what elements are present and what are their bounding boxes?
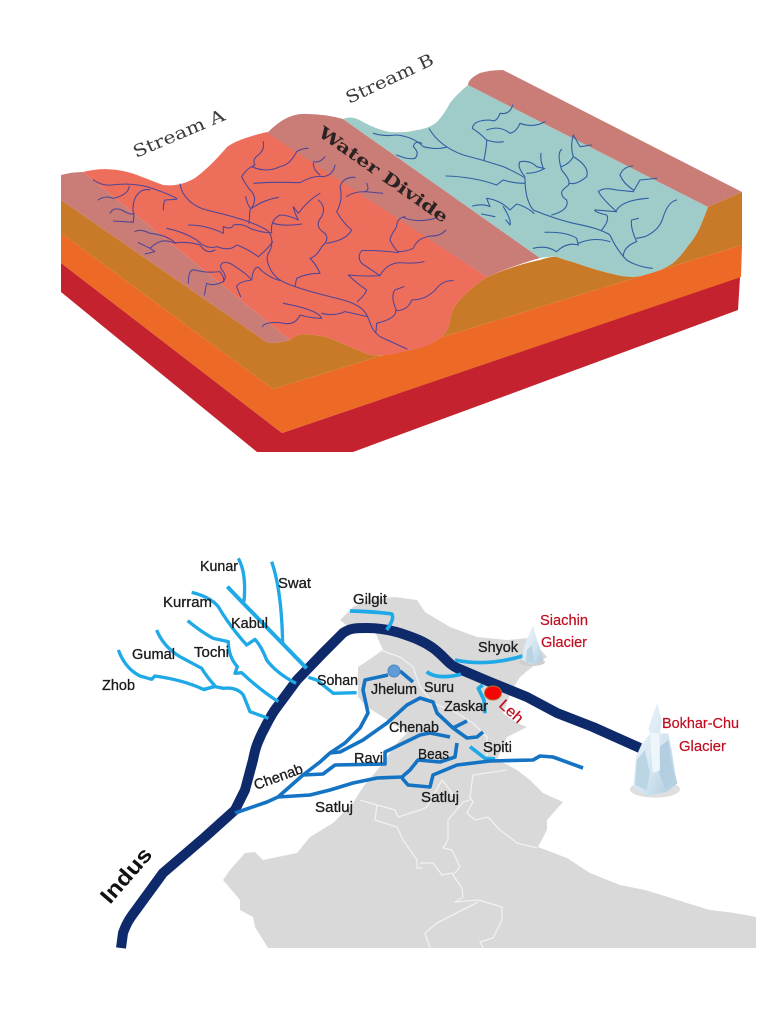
red bottom rock layer (61, 263, 740, 452)
rivers: Punjab tributaries (235, 671, 583, 813)
label: Siachin Glacier: Glacier (541, 634, 587, 651)
label: Suru: Suru (424, 680, 454, 696)
orange rock layer (61, 233, 742, 433)
river network: stream A east (262, 217, 453, 332)
label: Kunar: Kunar (200, 559, 238, 575)
label: Beas: Beas (418, 747, 449, 763)
label: Siachin Glacier: Siachin (540, 612, 588, 629)
label: Jhelum: Jhelum (371, 682, 417, 698)
label: Spiti: Spiti (483, 740, 512, 756)
left ridge band (61, 172, 290, 343)
label: Indus: Indus (95, 842, 157, 908)
label: Bokhar-Chu Glacier: Glacier (679, 738, 726, 755)
label: Sohan: Sohan (317, 673, 358, 689)
label: Chenab lower: Chenab (252, 761, 305, 794)
label: Zaskar: Zaskar (444, 699, 488, 715)
river network: stream A west (93, 142, 407, 349)
right ridge band (468, 70, 742, 207)
panel: watershed block diagram (61, 50, 742, 452)
label: Swat: Swat (278, 576, 311, 592)
label: Bokhar-Chu Glacier: Bokhar-Chu (662, 715, 739, 732)
label: Chenab upper: Chenab (389, 720, 439, 736)
label: Satluj right: Satluj (421, 790, 459, 806)
panel: Indus river system map (95, 558, 756, 948)
water divide ridge band (267, 114, 540, 277)
map: state boundary lines (360, 650, 537, 948)
label: Satluj left: Satluj (315, 800, 353, 816)
label: Water Divide: Water Divide (314, 122, 452, 227)
basin of stream A (83, 132, 487, 355)
map: grey landmass of north India (223, 597, 756, 948)
label: Tochi: Tochi (194, 645, 229, 661)
label: Shyok: Shyok (478, 640, 519, 656)
label: Leh: Leh (495, 696, 527, 727)
river: Indus main stem (121, 628, 640, 948)
icon: Siachin glacier (519, 625, 545, 666)
label: Kurram: Kurram (163, 595, 212, 611)
rivers: light blue upper tributaries (350, 611, 523, 759)
label: Ravi: Ravi (354, 751, 383, 767)
icon: Jhelum source lake (388, 665, 400, 677)
label: Kabul: Kabul (231, 616, 268, 632)
label: Stream A: Stream A (130, 106, 229, 163)
label: Zhob: Zhob (102, 678, 135, 694)
icon: Bokhar-Chu glacier (630, 703, 680, 798)
icon: Leh location marker (484, 686, 502, 700)
rivers: light blue western tributaries (118, 558, 357, 718)
label: Gilgit: Gilgit (353, 592, 387, 608)
river network: stream B (373, 105, 677, 268)
brown soil layer (61, 192, 742, 389)
label: Stream B: Stream B (343, 50, 437, 109)
label: Gumal: Gumal (132, 647, 175, 663)
basin of stream B (343, 85, 708, 277)
